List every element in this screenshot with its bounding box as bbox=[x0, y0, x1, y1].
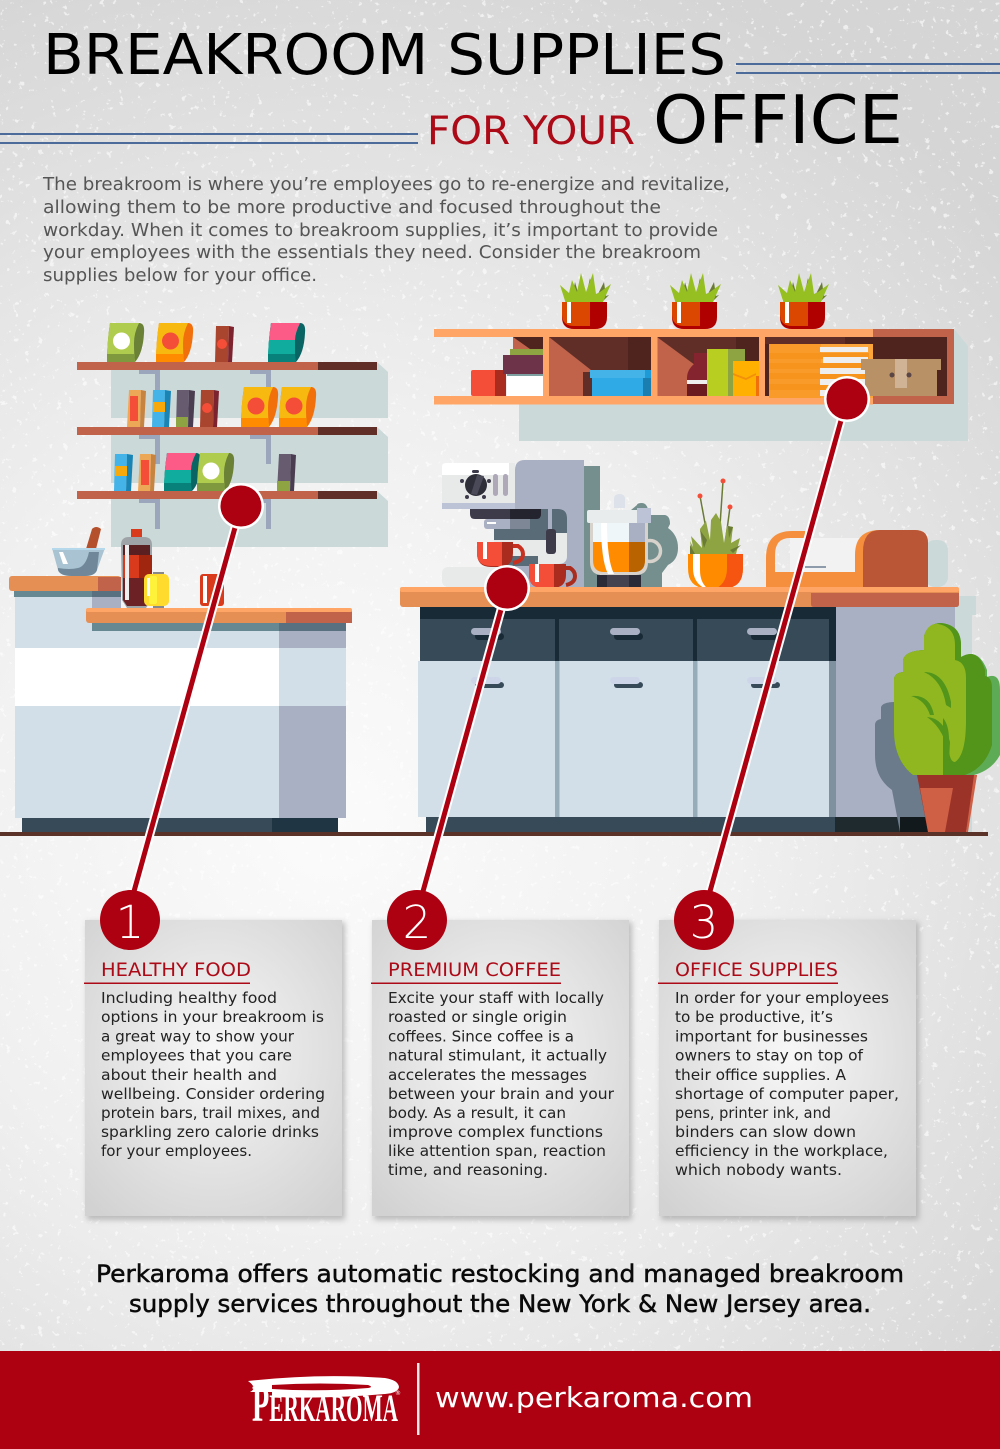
logo: perkaroma: PERKAROMA bbox=[252, 1376, 398, 1433]
text block: healthy food: for your employees. bbox=[101, 1142, 252, 1160]
number badge 1: 1 bbox=[116, 896, 144, 949]
left counter bbox=[9, 527, 352, 832]
text block: office supplies: their office supplies. A bbox=[675, 1066, 847, 1084]
text block: premium coffee: like attention span, reaction bbox=[388, 1142, 606, 1160]
closing statement: supply services throughout the New York & New Jersey area. bbox=[129, 1290, 871, 1318]
countertop bbox=[400, 587, 959, 607]
icon: red cup bbox=[477, 542, 523, 567]
icon: red box bbox=[471, 370, 506, 396]
icon: bread box bbox=[766, 530, 948, 587]
floor line bbox=[0, 832, 988, 836]
blue box bbox=[114, 454, 133, 491]
panel: office supplies bbox=[658, 920, 919, 1220]
icon: blue box bbox=[583, 370, 651, 396]
text block: office supplies: binders can slow down bbox=[675, 1123, 856, 1141]
stack of paper bbox=[769, 344, 873, 398]
text block: office supplies: pens, printer ink, and bbox=[675, 1104, 831, 1122]
orange box bbox=[127, 390, 146, 427]
text block: office supplies bbox=[675, 989, 899, 1179]
icon: potted succulent bbox=[778, 273, 829, 329]
text block: healthy food: options in your breakroom is bbox=[101, 1008, 324, 1026]
heading: office supplies: OFFICE SUPPLIES bbox=[675, 960, 838, 981]
callout pin 2 bbox=[422, 565, 530, 895]
red box bbox=[215, 326, 234, 362]
number badge 3 bbox=[674, 890, 734, 950]
text block: premium coffee: improve complex functions bbox=[388, 1123, 603, 1141]
text block: premium coffee: accelerates the messages bbox=[388, 1066, 587, 1084]
logo: perkaroma: ® bbox=[395, 1390, 401, 1397]
purple box bbox=[277, 454, 296, 491]
text block: office supplies: to be productive, it’s bbox=[675, 1008, 833, 1026]
text block: office supplies: efficiency in the workplace, bbox=[675, 1142, 888, 1160]
text block: office supplies: shortage of computer paper, bbox=[675, 1085, 899, 1103]
pink snack bag bbox=[164, 453, 201, 491]
text block: healthy food: Including healthy food bbox=[101, 989, 277, 1007]
intro text: allowing them to be more productive and focused throughout the bbox=[43, 198, 661, 218]
kitchen cabinet bbox=[418, 596, 976, 832]
icon: potted succulent bbox=[560, 273, 611, 329]
text block: premium coffee: coffees. Since coffee is a bbox=[388, 1028, 574, 1046]
yellow snack bag bbox=[241, 387, 278, 427]
callout pin 1 bbox=[133, 483, 264, 895]
number badge 1 bbox=[100, 890, 160, 950]
text block: premium coffee: natural stimulant, it actually bbox=[388, 1046, 607, 1064]
green snack bag bbox=[107, 323, 144, 362]
icon: red cup bbox=[529, 564, 575, 588]
text block: office supplies: important for businesses bbox=[675, 1028, 868, 1046]
text block: office supplies: which nobody wants. bbox=[675, 1161, 842, 1179]
icon: potted flower bbox=[688, 478, 743, 588]
icon: soda bottle bbox=[121, 529, 152, 608]
text block: healthy food: employees that you care bbox=[101, 1046, 292, 1064]
icon: floor plant bbox=[875, 623, 1000, 832]
stacked boxes bbox=[503, 349, 543, 396]
closing statement bbox=[96, 1260, 904, 1318]
text block: healthy food: a great way to show your bbox=[101, 1028, 295, 1046]
green snack bag bbox=[197, 453, 234, 491]
icon: mortar and pestle bbox=[52, 527, 105, 576]
text block: premium coffee: Excite your staff with locally bbox=[388, 989, 604, 1007]
text block: premium coffee: time, and reasoning. bbox=[388, 1161, 548, 1179]
icon: potted succulent bbox=[670, 273, 721, 329]
callout pin 3 bbox=[709, 376, 870, 895]
number badge 2 bbox=[387, 890, 447, 950]
left wall shelves bbox=[77, 323, 388, 547]
text block: healthy food: sparkling zero calorie drinks bbox=[101, 1123, 319, 1141]
text block: premium coffee: roasted or single origin bbox=[388, 1008, 567, 1026]
heading: for your: FOR YOUR bbox=[427, 109, 635, 154]
wall cubby shelf bbox=[434, 329, 968, 441]
panel: premium coffee bbox=[371, 920, 632, 1220]
text block: premium coffee bbox=[388, 989, 615, 1179]
supplies: bottle and boxes bbox=[687, 349, 759, 396]
text block: premium coffee: body. As a result, it can bbox=[388, 1104, 566, 1122]
intro text bbox=[42, 175, 730, 286]
pink snack bag bbox=[268, 323, 305, 362]
panel: healthy food bbox=[84, 920, 345, 1220]
intro text: workday. When it comes to breakroom supplies, it’s important to provide bbox=[43, 221, 718, 241]
heading: office: OFFICE bbox=[653, 81, 903, 159]
footer band bbox=[0, 1351, 1000, 1449]
yellow snack bag bbox=[279, 387, 316, 427]
blender bbox=[587, 494, 678, 587]
icon: yellow can bbox=[144, 572, 169, 608]
espresso machine bbox=[442, 460, 600, 588]
closing statement: Perkaroma offers automatic restocking and managed breakroom bbox=[96, 1260, 904, 1288]
text block: healthy food bbox=[101, 989, 325, 1160]
number badge 2: 2 bbox=[403, 896, 431, 949]
orange box bbox=[138, 454, 156, 491]
drawer handles bbox=[471, 628, 780, 688]
intro text: supplies below for your office. bbox=[43, 266, 317, 286]
icon: red can bbox=[200, 574, 224, 606]
intro text: your employees with the essentials they need. Consider the breakroom bbox=[43, 243, 701, 263]
logo: perkaroma bbox=[248, 1376, 401, 1433]
blue box bbox=[152, 390, 171, 427]
website url: www.perkaroma.com bbox=[435, 1381, 753, 1414]
heading: premium coffee: PREMIUM COFFEE bbox=[388, 960, 561, 981]
text block: healthy food: wellbeing. Consider ordering bbox=[101, 1085, 325, 1103]
title bbox=[43, 23, 903, 159]
number badge 3: 3 bbox=[690, 896, 718, 949]
text block: healthy food: about their health and bbox=[101, 1066, 277, 1084]
purple box bbox=[176, 390, 195, 427]
yellow snack bag bbox=[156, 323, 193, 362]
heading line 1: BREAKROOM SUPPLIES bbox=[43, 23, 726, 88]
icon: cardboard box bbox=[861, 359, 941, 396]
text block: office supplies: owners to stay on top of bbox=[675, 1046, 864, 1064]
text block: premium coffee: between your brain and your bbox=[388, 1085, 615, 1103]
text block: healthy food: protein bars, trail mixes, and bbox=[101, 1104, 320, 1122]
text block: office supplies: In order for your employees bbox=[675, 989, 889, 1007]
red box bbox=[200, 390, 219, 427]
heading: healthy food: HEALTHY FOOD bbox=[101, 960, 251, 981]
intro text: The breakroom is where you’re employees go to re-energize and revitalize, bbox=[42, 175, 730, 195]
